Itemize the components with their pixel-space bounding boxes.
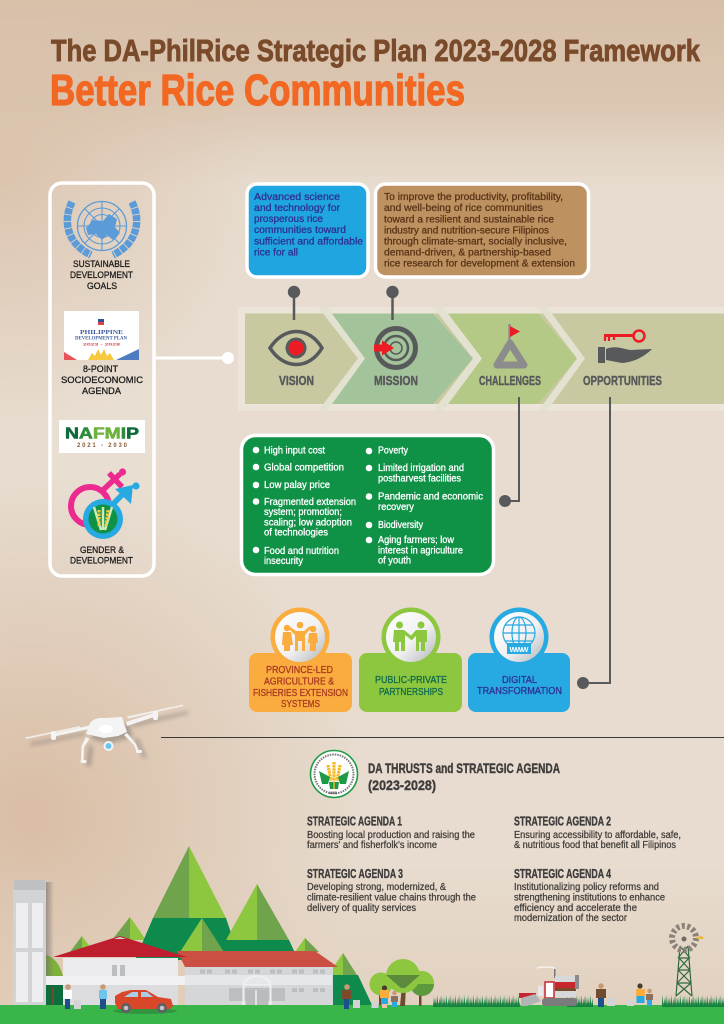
label: SDG: SUSTAINABLE <box>73 259 130 270</box>
agenda 2: Ensuring accessibility to affordable, safe, <box>514 830 681 841</box>
agenda 4: STRATEGIC AGENDA 4 <box>514 867 611 881</box>
text: digital: DIGITAL <box>502 675 537 686</box>
connector: frameworks to band <box>154 352 234 364</box>
panel: mission <box>376 184 588 277</box>
text: digital <box>477 675 562 697</box>
icon: Philippine Development Plan logo <box>64 311 139 360</box>
illustration: windmill <box>672 926 704 996</box>
agenda 4 <box>514 867 666 924</box>
panel: mission: rice research for development & extension <box>384 258 575 270</box>
label: gender and development: DEVELOPMENT <box>70 556 133 566</box>
challenges: right column: Pandemic and economic <box>378 492 483 502</box>
icon: UN emblem <box>67 201 137 255</box>
panel: mission: To improve the productivity, profitability, <box>384 192 563 203</box>
chevron band: vision, mission, challenges, opportunities <box>238 307 724 411</box>
panel: mission: toward a resilient and sustainable rice <box>384 214 555 226</box>
icon: NAFMIP logo <box>59 420 145 453</box>
challenges: left column: Food and nutrition <box>264 546 339 557</box>
agenda 2 <box>514 814 681 851</box>
people: farmer and family <box>596 983 653 1007</box>
challenges: right column: Poverty <box>378 446 408 456</box>
card: province-led extension <box>249 608 352 712</box>
label: gender and development <box>70 545 133 566</box>
agenda 1: Boosting local production and raising the <box>307 830 476 841</box>
icon: NAFMIP logo: 2021 - 2030 <box>77 443 128 449</box>
label: SDG <box>70 259 133 292</box>
challenges: right column: Limited irrigation and <box>378 463 464 474</box>
challenges: right column <box>378 446 483 566</box>
panel: mission: through climate-smart, socially inclusive, <box>384 236 567 248</box>
subtitle: Better Rice Communities <box>50 66 465 115</box>
agenda 3 <box>307 867 477 914</box>
illustration: drone <box>25 704 188 766</box>
text: province-led: FISHERIES EXTENSION <box>253 688 348 699</box>
icon: handshake <box>393 622 427 651</box>
agenda 1 <box>307 814 476 851</box>
icon: hand and key <box>598 330 652 363</box>
agenda 4: efficiency and accelerate the <box>514 903 638 914</box>
ground <box>0 1005 724 1024</box>
icon: eye <box>270 332 322 364</box>
icon: globe www: WWW <box>510 645 529 654</box>
pin: mission <box>386 286 399 320</box>
text: digital: TRANSFORMATION <box>477 686 562 697</box>
challenges: left column: of technologies <box>264 528 328 539</box>
challenges: left column: Global competition <box>264 462 344 474</box>
agenda 4: Institutionalizing policy reforms and <box>514 882 659 893</box>
challenges: right column: Biodiversity <box>378 520 423 531</box>
label: SDG: GOALS <box>87 281 117 292</box>
agenda 2: & nutritious food that benefit all Filipinos <box>514 840 676 851</box>
panel: mission: and well-being of rice communities <box>384 203 543 214</box>
panel: vision: and technology for <box>254 203 341 214</box>
challenges: right column: Aging farmers; low <box>378 535 455 546</box>
people: couple and child <box>372 985 398 1008</box>
agenda 4: strengthening institutions to enhance <box>514 892 666 904</box>
label: gender and development: GENDER & <box>80 545 125 556</box>
icon: Philippine Development Plan logo: DEVELOPMENT PLAN <box>75 336 127 342</box>
label: challenges: CHALLENGES <box>479 374 541 388</box>
label: 8-point agenda: AGENDA <box>82 386 122 397</box>
label: SDG: DEVELOPMENT <box>70 270 133 281</box>
agenda 3: Developing strong, modernized, & <box>307 882 446 893</box>
panel: challenges list <box>242 436 494 574</box>
challenges: left column: system; promotion; <box>264 507 342 518</box>
panel: vision: prosperous rice <box>254 214 324 225</box>
connector: challenges to list <box>499 397 519 507</box>
agenda 4: modernization of the sector <box>514 913 628 924</box>
logo: Department of Agriculture seal: 1898 <box>329 791 337 795</box>
card: digital transformation <box>468 608 570 712</box>
icon: NAFMIP logo: NAFMIP <box>65 426 139 442</box>
text: province-led: PROVINCE-LED <box>266 665 333 676</box>
panel: vision: communities toward <box>254 225 346 236</box>
illustration: tower <box>13 880 54 1005</box>
text: province-led: SYSTEMS <box>281 699 320 710</box>
icon: gender and development <box>71 468 140 539</box>
icon: target <box>374 328 416 368</box>
label: mission: MISSION <box>374 374 418 388</box>
grass rows <box>433 994 724 1007</box>
text: public-private: PUBLIC-PRIVATE <box>375 675 447 686</box>
text: province-led <box>253 665 348 710</box>
panel: mission: demand-driven, & partnership-based <box>384 248 551 258</box>
panel: mission: industry and nutrition-secure Filipinos <box>384 226 549 236</box>
panel: vision <box>247 184 368 277</box>
agenda 3: delivery of quality services <box>307 903 416 914</box>
panel: vision: Advanced science <box>254 192 341 203</box>
illustration: mountains <box>46 846 372 1005</box>
illustration: building <box>46 936 338 1005</box>
text: province-led: AGRICULTURE & <box>264 676 334 688</box>
heading: DA thrusts: DA THRUSTS and STRATEGIC AGENDA <box>368 760 560 776</box>
label: 8-point agenda: 8-POINT <box>83 364 118 375</box>
challenges: right column: of youth <box>378 556 411 566</box>
people: left group <box>63 984 360 1009</box>
challenges: right column: recovery <box>378 502 414 513</box>
challenges: left column <box>264 446 356 567</box>
agenda 1: STRATEGIC AGENDA 1 <box>307 814 402 828</box>
text: public-private: PARTNERSHIPS <box>379 687 443 698</box>
challenges: left column: Fragmented extension <box>264 497 356 508</box>
icon: mountain and flag <box>497 324 524 365</box>
challenges: left column: High input cost <box>264 446 325 456</box>
icon: three people <box>282 622 318 651</box>
agenda 3: climate-resilient value chains through the <box>307 892 477 904</box>
pin: vision <box>288 286 300 320</box>
challenges: left column: Low palay price <box>264 480 331 491</box>
card: public-private partnerships <box>359 608 462 712</box>
heading: DA thrusts: (2023-2028) <box>368 777 436 793</box>
label: 8-point agenda <box>61 364 143 397</box>
challenges: left column: scaling; low adoption <box>264 518 352 529</box>
text: public-private <box>375 675 447 698</box>
illustration: combine harvester <box>519 967 579 1006</box>
logo: Department of Agriculture seal <box>310 750 358 798</box>
challenges: right column: postharvest facilities <box>378 474 461 484</box>
label: vision: VISION <box>279 374 314 388</box>
agenda 2: STRATEGIC AGENDA 2 <box>514 814 611 828</box>
agenda 3: STRATEGIC AGENDA 3 <box>307 867 403 881</box>
panel: vision: sufficient and affordable <box>254 236 364 248</box>
panel: vision: rice for all <box>254 248 298 258</box>
icon: Philippine Development Plan logo: 2023 - 2028 <box>83 342 120 346</box>
connector: opportunities to enablers <box>577 397 610 689</box>
panel: global and national frameworks <box>50 183 154 576</box>
label: opportunities: OPPORTUNITIES <box>583 374 662 388</box>
challenges: right column: interest in agriculture <box>378 546 464 556</box>
agenda 1: farmers' and fisherfolk's income <box>307 840 438 851</box>
challenges: left column: insecurity <box>264 556 303 567</box>
illustration: trees <box>370 959 434 1006</box>
heading: DA thrusts <box>368 760 560 793</box>
label: 8-point agenda: SOCIOECONOMIC <box>61 375 143 386</box>
illustration: car <box>113 990 177 1014</box>
icon: Philippine Development Plan logo: PHILIPPINE <box>80 329 124 336</box>
bullets <box>253 447 372 553</box>
